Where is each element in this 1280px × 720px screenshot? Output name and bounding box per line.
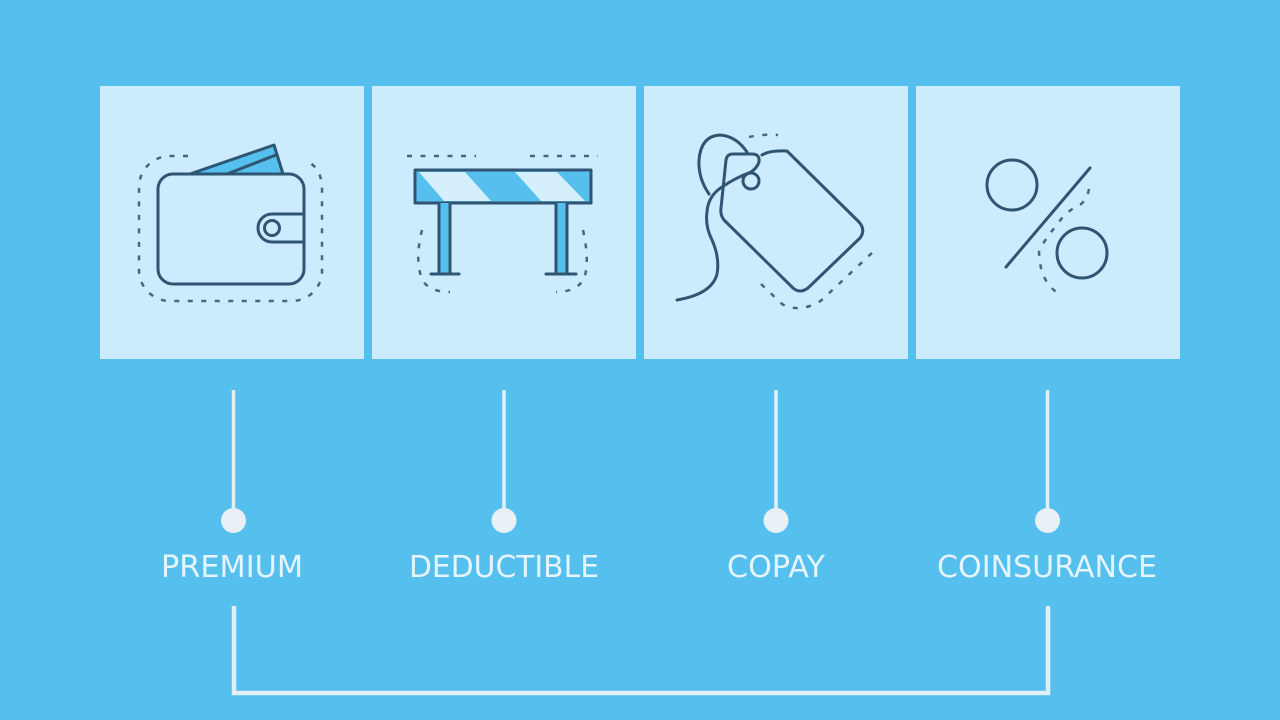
- connector: coinsurance: [1035, 390, 1060, 533]
- panel: deductible barrier: [372, 86, 636, 359]
- icon: road barrier: [407, 156, 598, 292]
- connector: copay: [764, 390, 788, 533]
- label: deductible: DEDUCTIBLE: [409, 550, 599, 585]
- panel: coinsurance percent: [916, 86, 1180, 359]
- icon: wallet: [139, 145, 322, 301]
- panel: premium wallet: [100, 86, 364, 359]
- label: copay: COPAY: [727, 550, 826, 585]
- connector: premium: [221, 390, 246, 533]
- label: coinsurance: COINSURANCE: [937, 550, 1157, 585]
- panel: copay price tag: [644, 86, 908, 359]
- label: premium: PREMIUM: [161, 550, 303, 585]
- icon: percent sign: [987, 160, 1107, 293]
- bracket connecting premium and coinsurance: [234, 606, 1048, 693]
- icon: price tag: [677, 135, 874, 308]
- connector: deductible: [492, 390, 516, 533]
